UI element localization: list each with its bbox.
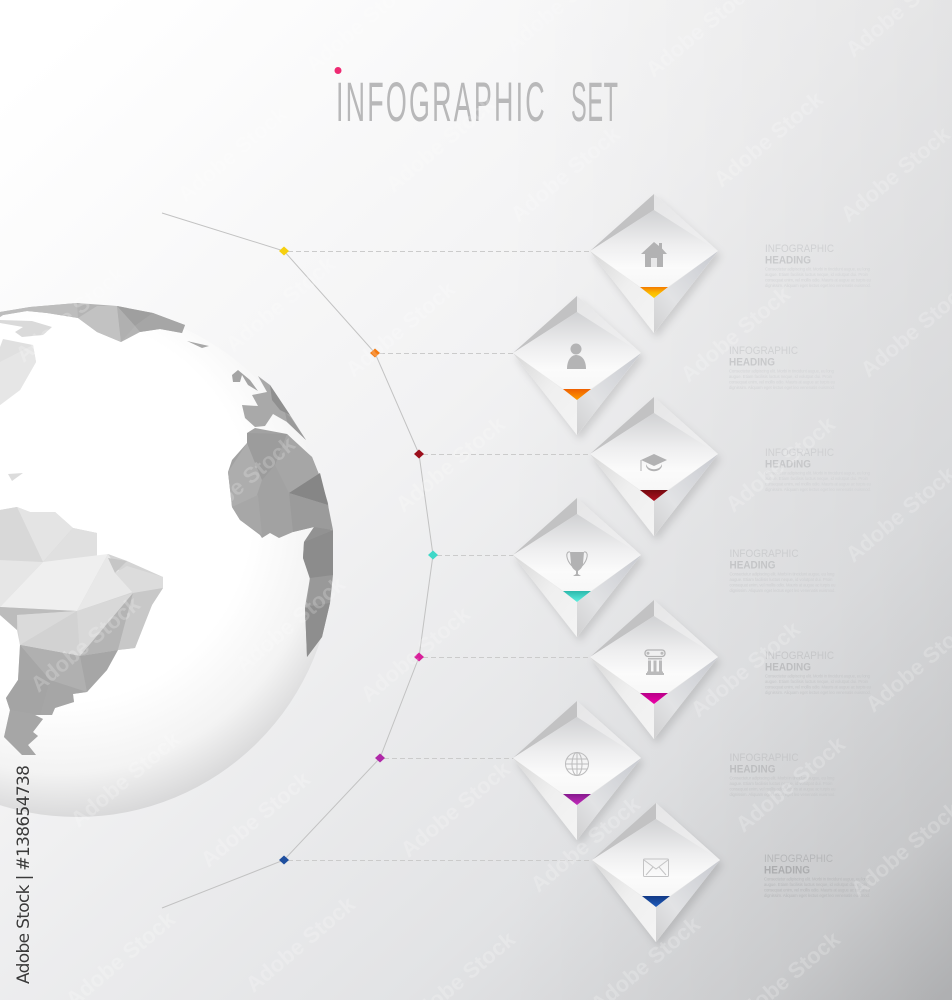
dashed leader lines xyxy=(288,252,592,860)
watermarks: Adobe Stock xyxy=(709,86,828,192)
text block 5: dignissim. Aliquam eget lectus eget leo venenatis euismod. xyxy=(765,690,871,695)
text block 7: INFOGRAPHIC xyxy=(764,853,833,865)
text block 7: consequat enim, vel mollis odio. Mauris at augue ac turpis eu xyxy=(764,888,871,892)
accent xyxy=(563,794,591,805)
text block 5: consequat enim, vel mollis odio. Mauris at augue ac turpis eu xyxy=(765,684,872,690)
continent: south america xyxy=(0,507,163,755)
text block 6: dignissim. Aliquam eget lectus eget leo venenatis euismod. xyxy=(730,792,836,797)
watermarks: Adobe Stock xyxy=(731,731,850,837)
text block 7: Consectetur adipiscing elit. Morbi in tincidunt augue, eu long xyxy=(764,876,870,882)
text block 4: augue. Etiam facilisis luctus neque, id volutpat dui. Proin xyxy=(730,577,833,582)
watermarks: Adobe Stock xyxy=(676,281,795,387)
title xyxy=(334,67,619,134)
text block 3: dignissim. Aliquam eget lectus eget leo venenatis euismod. xyxy=(765,487,871,492)
text block 7: dignissim. Aliquam eget lectus eget leo venenatis euismod. xyxy=(764,893,870,898)
text block 3: INFOGRAPHIC xyxy=(765,447,834,459)
icon: person xyxy=(567,344,586,369)
text block 6: Consectetur adipiscing elit. Morbi in tincidunt augue, eu long xyxy=(730,776,835,780)
text block 6: augue. Etiam facilisis luctus neque, id volutpat dui. Proin xyxy=(730,781,833,786)
text block 2: dignissim. Aliquam eget lectus eget leo venenatis euismod. xyxy=(729,385,835,390)
accent xyxy=(640,490,668,501)
watermarks: Adobe Stock xyxy=(56,391,175,497)
title: SET xyxy=(571,71,619,134)
text block 2: consequat enim, vel mollis odio. Mauris at augue ac turpis eu xyxy=(729,380,836,384)
diamond 1: home xyxy=(590,194,718,333)
text block 5: INFOGRAPHIC xyxy=(765,650,834,662)
watermarks: Adobe Stock xyxy=(396,756,515,862)
text block 7: HEADING xyxy=(764,864,810,876)
watermarks: Adobe Stock xyxy=(721,411,840,517)
watermarks: Adobe Stock xyxy=(26,591,145,697)
text block 2 xyxy=(729,345,836,390)
connector path xyxy=(162,213,433,908)
continent: europe xyxy=(232,370,306,440)
text block 4 xyxy=(730,548,836,593)
accent xyxy=(642,896,670,907)
watermarks: Adobe Stock xyxy=(46,66,165,172)
icon: envelope xyxy=(644,859,668,876)
text block 3: consequat enim, vel mollis odio. Mauris at augue ac turpis eu xyxy=(765,482,872,486)
watermarks: Adobe Stock xyxy=(221,251,340,357)
icon: globe xyxy=(566,752,588,776)
icon: house xyxy=(641,242,667,267)
diamond 2: person xyxy=(513,296,641,435)
watermarks: Adobe Stock xyxy=(356,601,475,707)
diamond 5: column xyxy=(590,600,718,739)
watermarks: Adobe Stock xyxy=(381,91,500,197)
text block 5 xyxy=(765,650,872,695)
node markers xyxy=(279,246,438,864)
continent: africa xyxy=(228,428,333,657)
text block 1: consequat enim, vel mollis odio. Mauris at augue ac turpis eu xyxy=(765,278,872,282)
title: INFOGRAPHIC xyxy=(336,71,547,134)
stock id label: Adobe Stock | #138654738 xyxy=(14,765,34,984)
watermarks: Adobe Stock xyxy=(686,616,805,722)
watermarks: Adobe Stock xyxy=(173,101,292,207)
icon: trophy xyxy=(567,552,587,576)
watermarks: Adobe Stock xyxy=(506,121,625,227)
text block 7: augue. Etiam facilisis luctus neque, id volutpat dui. Proin xyxy=(764,882,868,887)
text block 5: augue. Etiam facilisis luctus neque, id volutpat dui. Proin xyxy=(765,679,869,684)
text block 1: Consectetur adipiscing elit. Morbi in tincidunt augue, eu long xyxy=(765,266,871,272)
text block 6: consequat enim, vel mollis odio. Mauris at augue ac turpis eu xyxy=(730,786,836,792)
watermarks: Adobe Stock xyxy=(11,261,130,367)
text block 6: INFOGRAPHIC xyxy=(730,752,799,764)
text block 4: dignissim. Aliquam eget lectus eget leo venenatis euismod. xyxy=(730,588,836,593)
text block 1 xyxy=(765,243,872,288)
watermarks: Adobe Stock xyxy=(66,726,185,832)
diamond 6: globe xyxy=(513,701,641,840)
text block 3 xyxy=(765,447,872,492)
watermarks: Adobe Stock xyxy=(241,891,360,997)
text block 6 xyxy=(730,752,836,797)
diamond 4: trophy xyxy=(513,498,641,637)
text block 5: Consectetur adipiscing elit. Morbi in tincidunt augue, eu long xyxy=(765,674,871,678)
accent xyxy=(563,591,591,602)
watermarks: Adobe Stock xyxy=(526,791,645,897)
icon: cap xyxy=(640,454,667,471)
text block 7 xyxy=(764,853,871,898)
watermarks: Adobe Stock xyxy=(181,431,300,537)
text block 1: dignissim. Aliquam eget lectus eget leo venenatis euismod. xyxy=(765,283,871,288)
text block 2: HEADING xyxy=(729,356,775,368)
watermarks: Adobe Stock xyxy=(231,571,350,677)
text block 4: Consectetur adipiscing elit. Morbi in tincidunt augue, eu long xyxy=(730,572,835,576)
diamond 7: envelope xyxy=(592,803,720,942)
text block 3: HEADING xyxy=(765,458,811,470)
continent: northern landmass xyxy=(0,303,209,481)
watermarks: Adobe Stock xyxy=(391,411,510,517)
watermarks: Adobe Stock xyxy=(836,121,952,227)
globe xyxy=(0,303,333,817)
text block 4: HEADING xyxy=(730,560,776,572)
text block 2: INFOGRAPHIC xyxy=(729,345,798,357)
accent xyxy=(640,287,668,298)
accent xyxy=(563,389,591,400)
text block 3: augue. Etiam facilisis luctus neque, id volutpat dui. Proin xyxy=(765,476,869,481)
text block 3: Consectetur adipiscing elit. Morbi in tincidunt augue, eu long xyxy=(765,470,871,476)
text block 1: HEADING xyxy=(765,254,811,266)
text block 2: augue. Etiam facilisis luctus neque, id volutpat dui. Proin xyxy=(729,374,833,379)
diamond 3: graduation cap xyxy=(590,397,718,536)
text block 5: HEADING xyxy=(765,662,811,674)
text block 4: consequat enim, vel mollis odio. Mauris at augue ac turpis eu xyxy=(730,582,836,588)
text block 1: INFOGRAPHIC xyxy=(765,243,834,255)
accent xyxy=(640,693,668,704)
icon: column xyxy=(645,650,665,675)
text block 4: INFOGRAPHIC xyxy=(730,548,799,560)
text block 6: HEADING xyxy=(730,764,776,776)
watermarks: Adobe Stock xyxy=(196,766,315,872)
watermarks: Adobe Stock xyxy=(341,276,460,382)
text block 1: augue. Etiam facilisis luctus neque, id volutpat dui. Proin xyxy=(765,272,869,277)
text block 2: Consectetur adipiscing elit. Morbi in tincidunt augue, eu long xyxy=(729,368,835,374)
